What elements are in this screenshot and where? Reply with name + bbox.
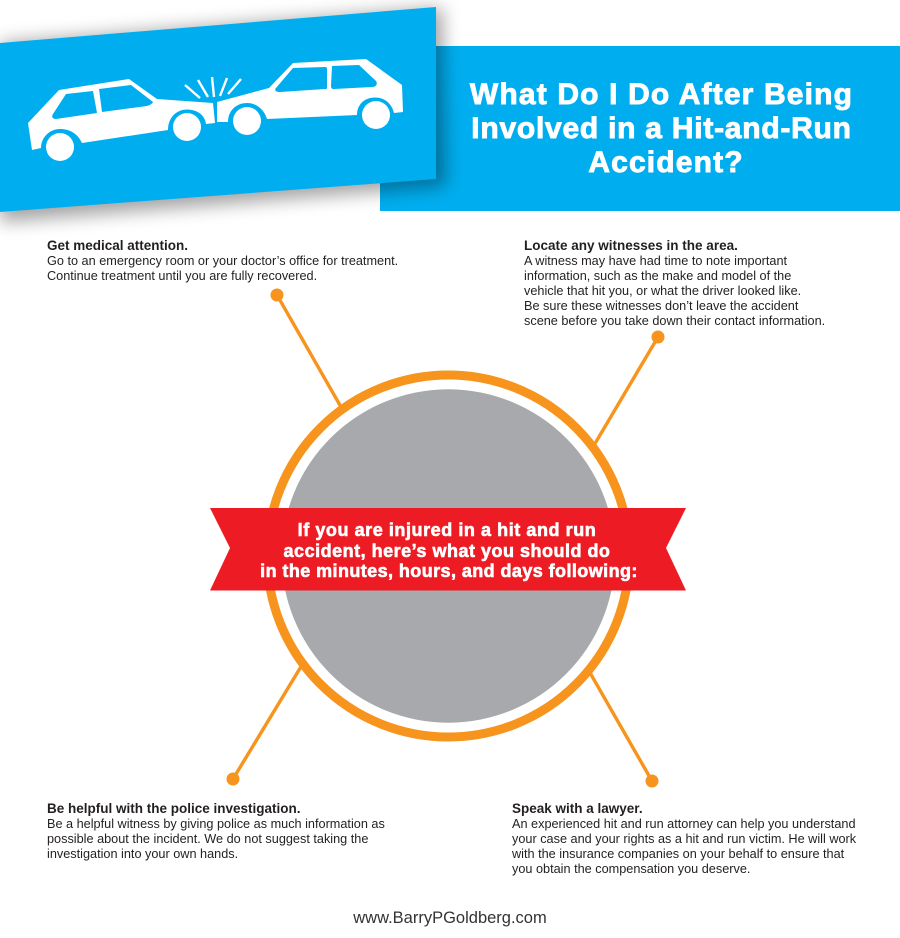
text block: get medical attention (47, 238, 398, 283)
text block: locate witnesses: vehicle that hit you, or what the driver looked like. (524, 284, 801, 298)
banner shadow (0, 8, 446, 222)
connector dots (226, 288, 664, 788)
text block: police investigation (47, 800, 385, 861)
text block: speak with a lawyer: Speak with a lawyer. (512, 800, 643, 816)
icon: impact sparks (185, 77, 241, 98)
icon: colliding cars (28, 59, 403, 161)
title background panel (380, 46, 900, 211)
text block: get medical attention: Get medical attention. (47, 238, 188, 252)
title: Accident? (588, 146, 744, 179)
text block: speak with a lawyer: An experienced hit and run attorney can help you understand (512, 816, 856, 830)
left car front wheel (173, 113, 201, 141)
text block: police investigation: Be a helpful witness by giving police as much information as (47, 816, 385, 830)
ribbon text: in the minutes, hours, and days following: (260, 561, 638, 581)
text block: police investigation: investigation into your own hands. (47, 847, 238, 861)
footer url: www.BarryPGoldberg.com (353, 909, 547, 927)
text block: locate witnesses: Be sure these witnesses don’t leave the accident (524, 299, 798, 313)
title (469, 78, 853, 179)
text block: police investigation: Be helpful with the police investigation. (47, 800, 301, 816)
right car front wheel (233, 107, 261, 135)
text block: speak with a lawyer: with the insurance companies on your behalf to ensure that (512, 847, 844, 861)
text block: get medical attention: Go to an emergency room or your doctor’s office for treatment. (47, 254, 398, 268)
text block: locate witnesses (524, 238, 825, 328)
text block: locate witnesses: scene before you take down their contact information. (524, 314, 825, 328)
text block: police investigation: possible about the incident. We do not suggest taking the (47, 832, 368, 846)
left car rear wheel (46, 133, 74, 161)
right car rear wheel (362, 101, 390, 129)
ribbon text: accident, here’s what you should do (284, 541, 610, 561)
title: What Do I Do After Being (470, 78, 853, 111)
central circle: gray disc (282, 389, 615, 723)
text block: speak with a lawyer: you obtain the compensation you deserve. (512, 862, 750, 876)
central circle: orange ring (267, 375, 629, 737)
ribbon text (260, 520, 638, 582)
tilted banner (0, 7, 436, 212)
red ribbon (210, 508, 686, 590)
text block: locate witnesses: Locate any witnesses in the area. (524, 238, 738, 252)
text block: speak with a lawyer: your case and your rights as a hit and run victim. He will work (512, 832, 856, 846)
text block: get medical attention: Continue treatment until you are fully recovered. (47, 269, 317, 283)
title: Involved in a Hit-and-Run (471, 112, 852, 145)
right car (217, 59, 403, 122)
connector lines (233, 295, 658, 781)
text block: locate witnesses: A witness may have had time to note important (524, 254, 787, 268)
left car (28, 79, 215, 150)
ribbon text: If you are injured in a hit and run (298, 520, 596, 540)
text block: locate witnesses: information, such as the make and model of the (524, 269, 791, 283)
text block: speak with a lawyer (512, 800, 856, 876)
